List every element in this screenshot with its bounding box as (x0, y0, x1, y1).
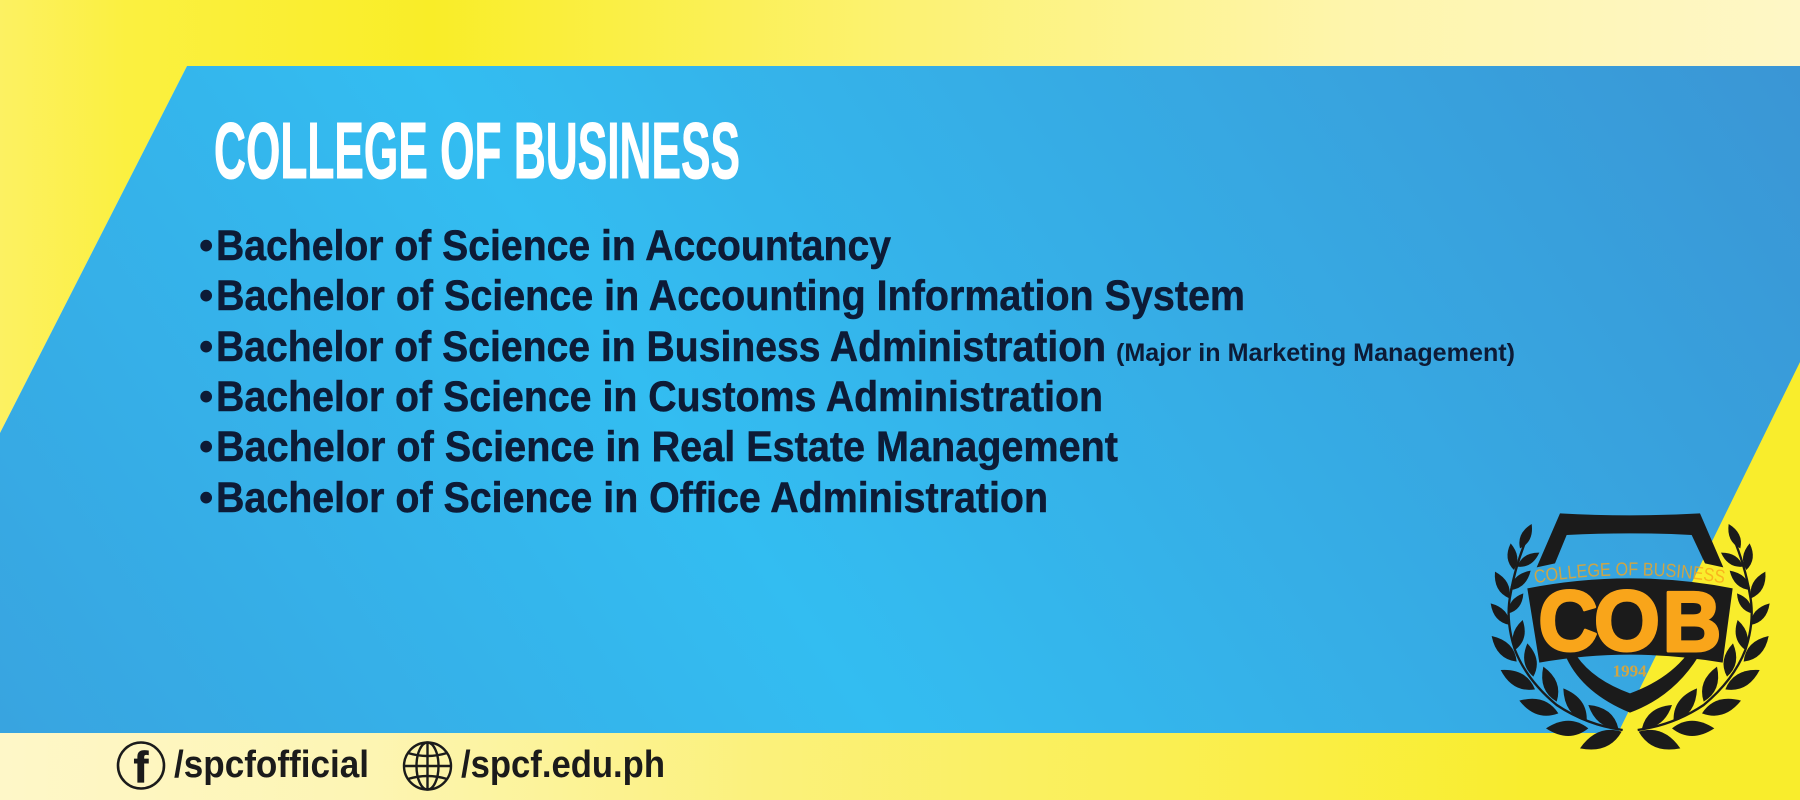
shield: bottom point (1567, 655, 1698, 713)
COB letters (1538, 574, 1721, 670)
icon: facebook: f (134, 743, 149, 792)
program list (199, 222, 1515, 522)
program: office administration: Bachelor of Science in Office Administration (216, 475, 1048, 522)
program: real estate management: • (199, 423, 213, 469)
program: accountancy: • (199, 222, 213, 268)
program: accounting information system: Bachelor of Science in Accounting Information System (216, 273, 1245, 320)
COB letters: O (1594, 574, 1660, 669)
program: office administration: • (199, 474, 213, 520)
COB letters: C (1538, 574, 1598, 669)
program: accountancy: Bachelor of Science in Accountancy (216, 223, 891, 270)
website handle: /spcf.edu.ph (461, 744, 665, 786)
icon: globe (404, 742, 451, 790)
program: business administration: • (199, 323, 213, 369)
program: customs administration: Bachelor of Science in Customs Administration (216, 374, 1103, 421)
program: customs administration: • (199, 373, 213, 419)
program: real estate management: Bachelor of Science in Real Estate Management (216, 424, 1118, 471)
wreath: right branch (1636, 522, 1774, 756)
wreath: left branch (1487, 522, 1625, 756)
facebook handle: /spcfofficial (174, 744, 369, 786)
shield: top frame (1537, 513, 1723, 567)
title: COLLEGE OF BUSINESS (214, 106, 740, 195)
footer: social links (118, 742, 665, 792)
founding year: 1994 (1613, 662, 1647, 681)
program: business administration: (Major in Marketing Management) (1116, 339, 1515, 367)
curved label: COLLEGE OF BUSINESS (1534, 562, 1725, 583)
background: top strip and left yellow wedge (0, 0, 1800, 433)
COB letters: B (1663, 575, 1721, 670)
icon: facebook (118, 742, 164, 792)
program: accounting information system: • (199, 272, 213, 318)
logo: COB emblem (1490, 513, 1770, 750)
banner (1527, 578, 1733, 663)
program: business administration: Bachelor of Science in Business Administration (216, 324, 1106, 371)
